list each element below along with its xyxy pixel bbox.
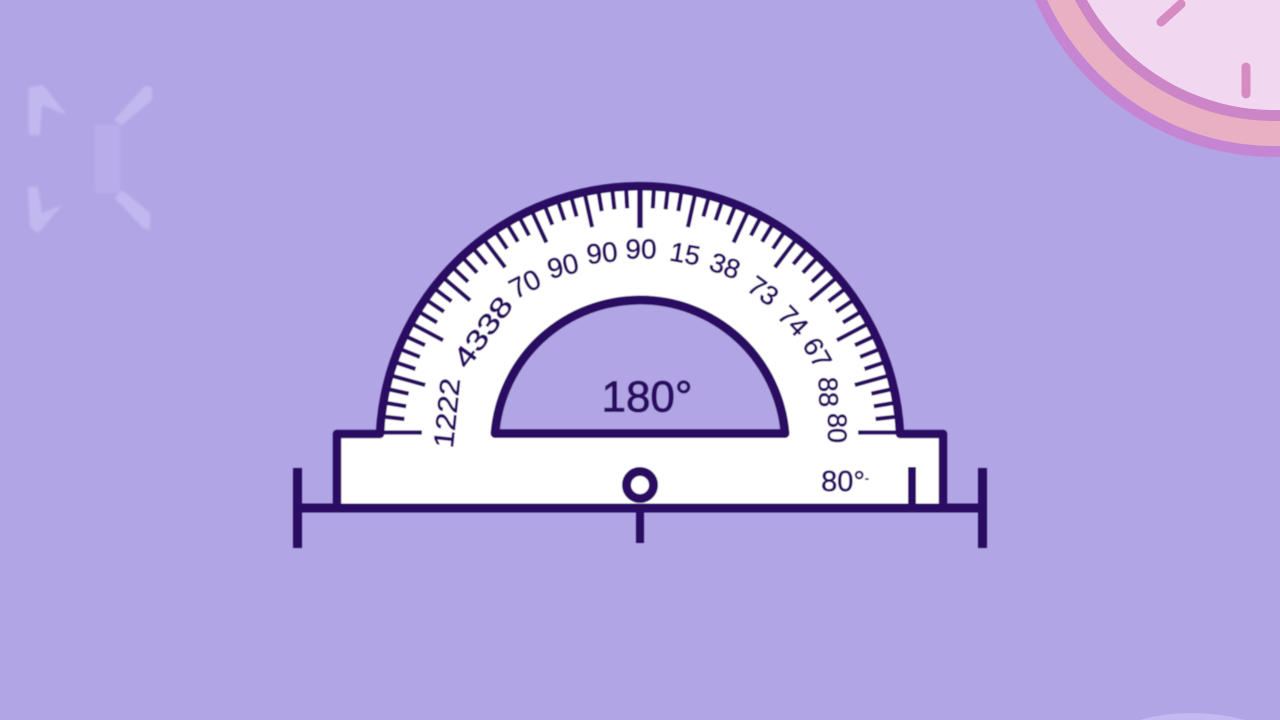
- scale numbers: 80: [822, 413, 852, 443]
- scale numbers: 90: [625, 234, 657, 264]
- scale numbers: 88: [812, 376, 844, 408]
- scale numbers: 38: [706, 247, 744, 285]
- scale numbers: 90: [585, 236, 619, 270]
- angle label: 180°: 180°: [601, 372, 693, 422]
- icon: clock in the top right corner: [1035, 0, 1280, 157]
- centre pivot ring: [626, 472, 654, 498]
- protractor body: [337, 186, 943, 508]
- scale numbers: 73: [742, 270, 784, 312]
- scale numbers: 15: [668, 237, 702, 271]
- ruler baseline: [297, 468, 982, 548]
- faint shape at the bottom edge: [1140, 713, 1245, 720]
- scale numbers: 90: [544, 247, 582, 285]
- label: 80°: -: [865, 471, 869, 485]
- protractor: [297, 186, 982, 548]
- degree ticks: [382, 186, 898, 432]
- icon: faint corner brackets: [28, 85, 152, 233]
- scale numbers: 74: [772, 300, 814, 342]
- scale numbers: [428, 234, 852, 449]
- inner cut-out: [495, 300, 785, 434]
- scale numbers: 67: [796, 332, 838, 374]
- scale numbers: 70: [504, 263, 546, 305]
- label: 80°: 80°: [821, 466, 865, 498]
- scale numbers: 4338: [447, 291, 519, 373]
- scale numbers: 1222: [428, 377, 466, 449]
- right marker tick: [908, 467, 916, 506]
